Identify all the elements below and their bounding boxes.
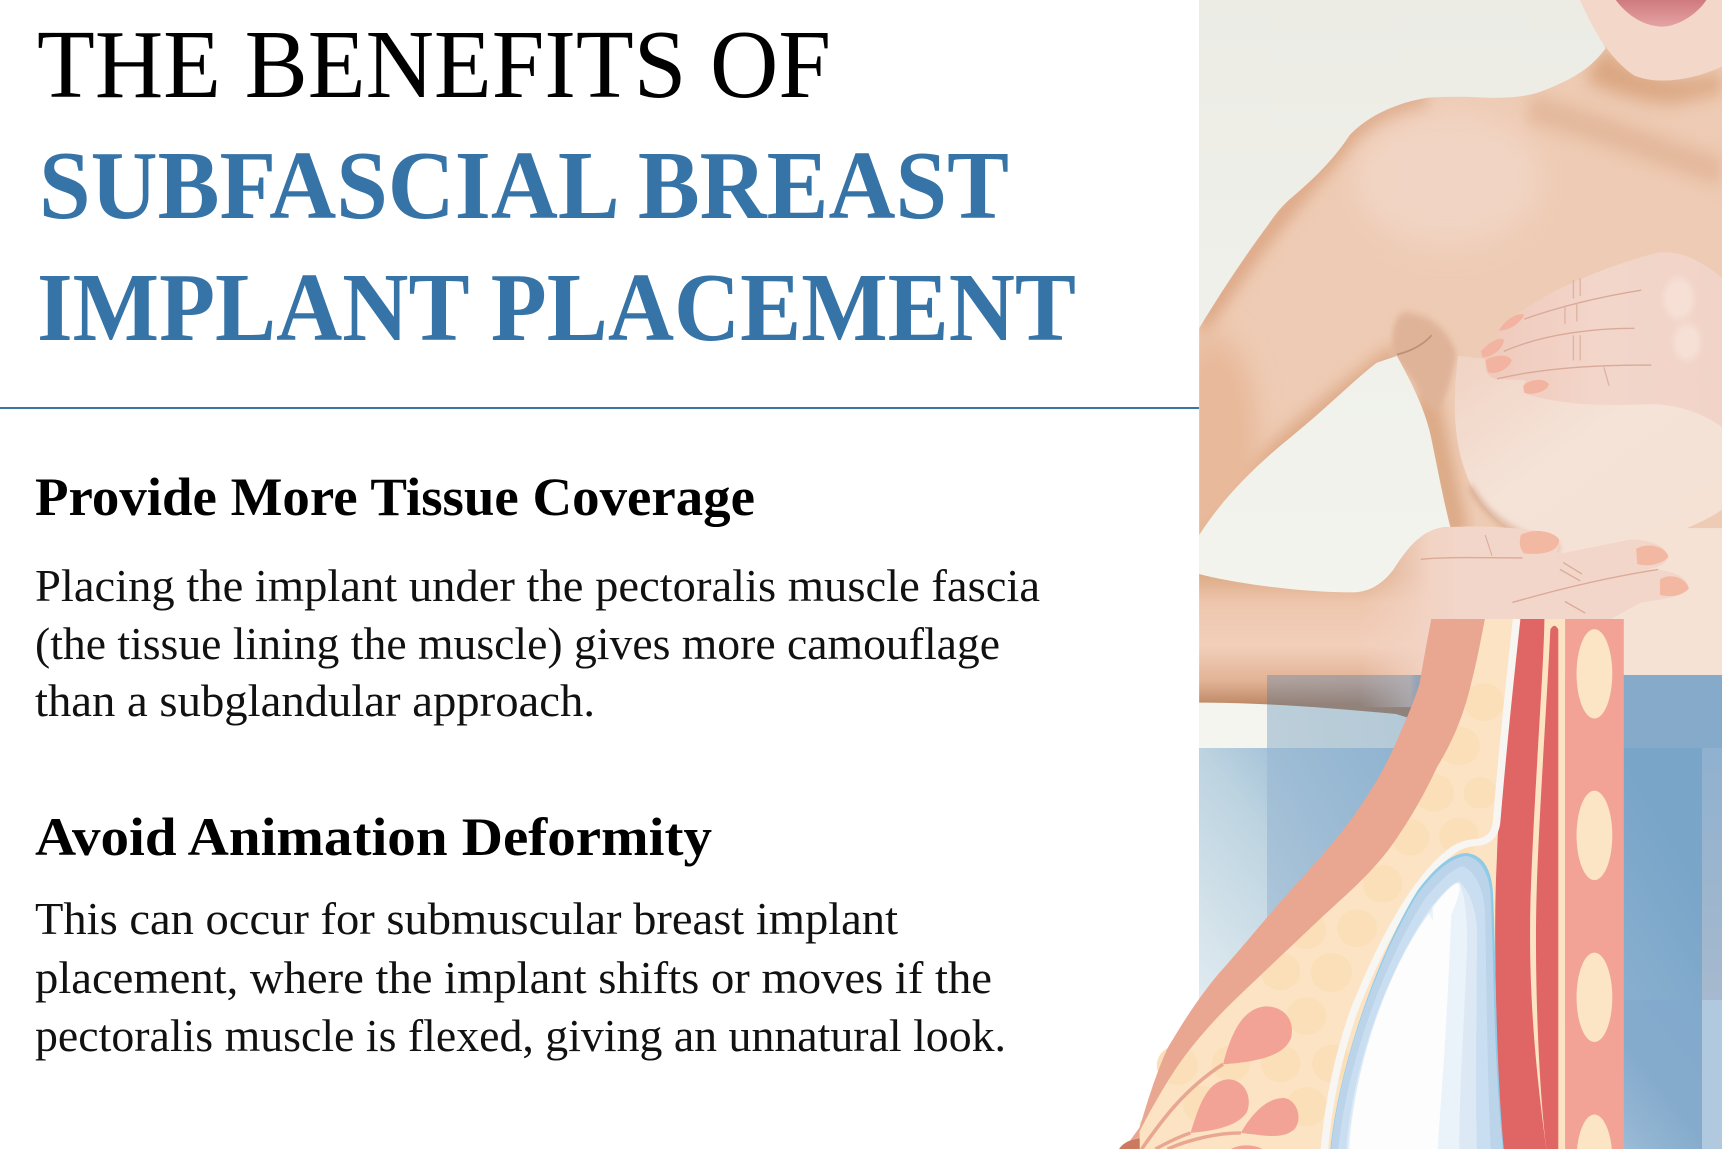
anatomical illustration: breast cross-section with subfascial implant <box>1119 619 1624 1149</box>
title <box>37 11 1076 362</box>
body text: tissue coverage: Placing the implant under the pectoralis muscle fascia <box>35 560 1040 611</box>
blue panel overlap <box>1267 748 1702 1000</box>
lower hand knuckle creases <box>1485 535 1585 613</box>
upper hand <box>1481 252 1722 427</box>
upper hand nails <box>1481 314 1549 394</box>
section: tissue coverage <box>35 467 1040 726</box>
body text: tissue coverage: (the tissue lining the muscle) gives more camouflage <box>35 618 1000 669</box>
blue gradient panel: upper, over photo <box>1267 675 1722 748</box>
body text: tissue coverage <box>35 560 1040 726</box>
breast <box>1455 356 1722 549</box>
body text: animation deformity: pectoralis muscle is flexed, giving an unnatural look. <box>35 1010 1006 1061</box>
blue gradient panel: lower <box>1199 748 1702 1149</box>
pectoralis muscle <box>1495 619 1546 1149</box>
heading: Provide More Tissue Coverage: Provide More Tissue Coverage <box>35 467 755 527</box>
arm, shoulder, chest and torso <box>1199 0 1722 675</box>
chin and face <box>1580 0 1722 81</box>
armpit <box>1392 312 1456 413</box>
fat layer <box>1140 619 1565 1149</box>
implant edge <box>1330 853 1504 1149</box>
elbow tone <box>1199 333 1263 529</box>
implant layer <box>1346 881 1477 1149</box>
lower arm edge shading <box>1199 356 1397 535</box>
skin layer <box>1124 619 1485 1149</box>
blue panel: right strip upper <box>1702 748 1722 1000</box>
implant <box>1330 853 1504 1149</box>
gland lobes <box>1190 1006 1298 1149</box>
lips <box>1616 0 1706 27</box>
torso side shade <box>1424 390 1458 537</box>
upper hand finger creases <box>1497 290 1651 379</box>
rib column <box>1565 619 1624 1149</box>
implant layer <box>1348 883 1467 1149</box>
implant shell <box>1331 856 1503 1149</box>
nipple <box>1119 1139 1140 1149</box>
implant core <box>1349 883 1460 1149</box>
implant layer <box>1338 866 1491 1149</box>
neck shade <box>1584 48 1722 103</box>
heading: Avoid Animation Deformity: Avoid Animation Deformity <box>35 807 712 867</box>
divider rule <box>0 407 1199 409</box>
ribs <box>1577 629 1612 1149</box>
lower hand <box>1360 527 1689 707</box>
collarbone shade <box>1529 108 1722 172</box>
milk ducts <box>1142 1064 1241 1149</box>
fascia line <box>1324 619 1517 1149</box>
fat cells <box>1157 683 1504 1126</box>
photo: woman's torso with hands <box>1170 0 1722 758</box>
section: animation deformity <box>35 807 1006 1061</box>
body text: animation deformity: placement, where the implant shifts or moves if the <box>35 952 992 1003</box>
knuckle highlights <box>1664 279 1693 318</box>
body text: animation deformity <box>35 893 1006 1061</box>
lower hand nails <box>1520 531 1689 596</box>
upper hand knuckle creases <box>1565 278 1609 386</box>
title line 1: THE BENEFITS OF <box>37 11 831 119</box>
breast underside shadow <box>1470 487 1560 549</box>
body text: tissue coverage: than a subglandular approach. <box>35 675 595 726</box>
lower torso <box>1552 528 1722 675</box>
forearm <box>1199 527 1448 718</box>
lower hand finger creases <box>1421 558 1658 602</box>
inner muscle <box>1536 626 1558 1149</box>
title line 2: SUBFASCIAL BREAST <box>39 132 1009 240</box>
blue panel: right strip lower <box>1702 1000 1722 1149</box>
armpit crease <box>1397 335 1432 355</box>
title line 3: IMPLANT PLACEMENT <box>37 254 1076 362</box>
body text: animation deformity: This can occur for submuscular breast implant <box>35 893 898 944</box>
outer arm edge shading <box>1199 98 1428 328</box>
shoulder highlight <box>1353 110 1543 248</box>
